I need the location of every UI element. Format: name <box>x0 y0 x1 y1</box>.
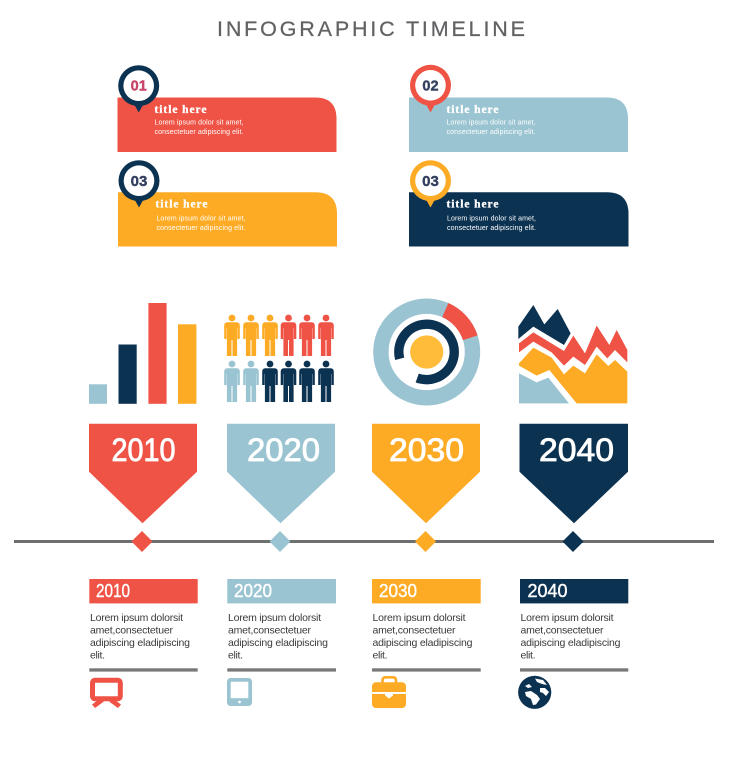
card 01 text: title here <box>154 104 206 116</box>
donut chart <box>381 306 473 398</box>
icon: pin 02: 02 <box>422 78 439 94</box>
marker: 2040 pentagon <box>520 424 628 523</box>
card 02 text: consectetuer adipiscing elit. <box>446 129 536 136</box>
icon: briefcase <box>372 677 406 708</box>
column 2030: 2030 <box>379 581 417 601</box>
card 03 text: consectetuer adipiscing elit. <box>156 225 246 232</box>
body text 2040: elit. <box>520 650 536 662</box>
icon: globe <box>518 676 551 709</box>
marker: 2030 pentagon: 2030 <box>389 432 464 468</box>
column 2030 <box>372 579 481 708</box>
body text 2010: Lorem ipsum dolorsit <box>90 612 183 624</box>
icon: pin 03 yellow <box>410 160 451 208</box>
body text 2040 <box>520 612 621 662</box>
body text 2020: Lorem ipsum dolorsit <box>228 612 321 624</box>
icon: tablet <box>227 678 252 706</box>
body text 2030: adipiscing eladipiscing <box>372 637 473 649</box>
body text 2030 <box>372 612 473 662</box>
column 2040: 2040 <box>528 581 568 601</box>
icon: presentation screen <box>92 680 121 708</box>
body text 2010 <box>90 612 190 662</box>
card 01 text <box>154 104 244 136</box>
card 01 text: consectetuer adipiscing elit. <box>154 129 244 136</box>
card 03 text: title here <box>156 199 208 211</box>
marker: 2020 pentagon: 2020 <box>247 432 320 468</box>
card 01 text: Lorem ipsum dolor sit amet, <box>154 120 244 126</box>
card 02 text: Lorem ipsum dolor sit amet, <box>446 120 536 126</box>
marker: 2040 pentagon: 2040 <box>539 432 614 468</box>
body text 2030: Lorem ipsum dolorsit <box>372 612 466 624</box>
bar chart <box>89 303 196 404</box>
card 02 text <box>446 104 536 136</box>
column 2010: 2010 <box>96 581 130 601</box>
column 2020 <box>227 579 336 706</box>
column 2020: 2020 <box>234 581 272 601</box>
timeline axis <box>14 540 714 543</box>
marker: 2030 pentagon <box>372 424 480 523</box>
card 04 text: title here <box>446 199 498 211</box>
people pictogram <box>224 315 334 402</box>
title: INFOGRAPHIC TIMELINE <box>217 17 525 41</box>
column 2040 <box>518 579 628 709</box>
card 03 text: Lorem ipsum dolor sit amet, <box>156 216 246 222</box>
body text 2040: Lorem ipsum dolorsit <box>520 612 614 624</box>
icon: pin 03 navy <box>118 160 160 208</box>
body text 2010: adipiscing eladipiscing <box>90 637 190 649</box>
body text 2030: elit. <box>372 650 388 662</box>
panel: card 02 blue <box>409 65 628 152</box>
card 04 text: consectetuer adipiscing elit. <box>447 225 536 232</box>
body text 2010: elit. <box>90 650 105 662</box>
body text 2040: amet,consectetuer <box>520 624 604 636</box>
panel: card 01 red <box>118 65 336 152</box>
marker: 2010 pentagon <box>89 424 197 523</box>
icon: pin 01 <box>118 65 159 112</box>
diamond 2030 <box>415 531 436 552</box>
icon: pin 02 <box>410 65 451 112</box>
body text 2020: elit. <box>228 650 243 662</box>
body text 2030: amet,consectetuer <box>372 624 456 636</box>
area chart <box>518 305 627 403</box>
column 2010 <box>89 579 198 708</box>
card 04 text: Lorem ipsum dolor sit amet, <box>447 216 536 222</box>
panel: card 03 yellow <box>118 160 337 246</box>
diamond 2040 <box>562 531 584 552</box>
body text 2020: amet,consectetuer <box>228 624 312 636</box>
card 03 text <box>156 199 246 232</box>
panel: card 04 navy <box>409 160 628 246</box>
marker: 2010 pentagon: 2010 <box>112 432 176 468</box>
body text 2010: amet,consectetuer <box>90 624 174 636</box>
card 04 text <box>446 199 536 232</box>
body text 2040: adipiscing eladipiscing <box>520 637 621 649</box>
body text 2020: adipiscing eladipiscing <box>228 637 328 649</box>
diamond 2020 <box>270 531 290 552</box>
body text 2020 <box>228 612 328 662</box>
card 02 text: title here <box>446 104 498 116</box>
diamond 2010 <box>132 531 152 552</box>
icon: pin 03 navy: 03 <box>131 173 147 190</box>
marker: 2020 pentagon <box>227 424 335 523</box>
icon: pin 01: 01 <box>131 79 147 95</box>
icon: pin 03 yellow: 03 <box>422 173 439 190</box>
